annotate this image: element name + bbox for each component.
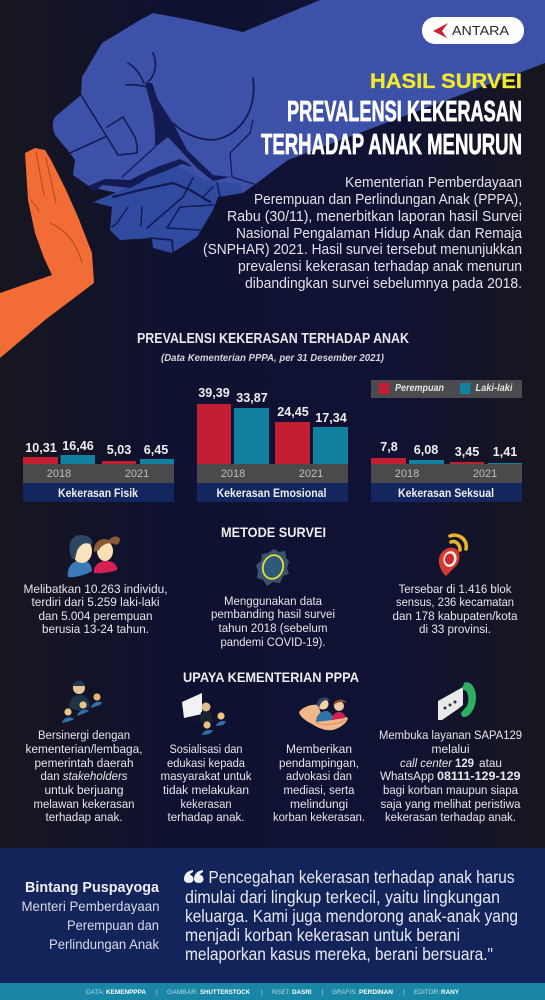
text: upaya column 3	[273, 742, 365, 824]
heading: upaya kementerian: UPAYA KEMENTERIAN PPPA	[183, 669, 359, 685]
chart heading: (Data Kementerian PPPA, per 31 Desember 2021)	[161, 353, 385, 364]
footer credits: SHUTTERSTOCK	[200, 989, 250, 996]
icon: presenter with board	[182, 693, 226, 735]
footer credits: RANY	[441, 989, 460, 996]
icon: hand protecting children	[299, 698, 348, 730]
footer credits: PERDINAN	[359, 989, 393, 996]
text: upaya column 4: kekerasan terhadap anak.	[385, 810, 516, 824]
bar chart: Kekerasan Seksual: 3,45	[455, 445, 479, 459]
text: upaya column 2: masyarakat untuk	[160, 769, 252, 783]
text: upaya column 2: tidak melakukan	[163, 783, 249, 797]
icon: location pin with signal	[439, 535, 466, 576]
text: metode column 1: Melibatkan 10.263 individu,	[24, 582, 168, 596]
bar chart: Kekerasan Seksual: Kekerasan Seksual	[398, 487, 494, 500]
text: upaya column 4: bagi korban maupun siapa	[383, 783, 518, 797]
text: upaya column 2: kekerasan	[180, 797, 232, 811]
text: upaya column 1: melawan kekerasan	[34, 797, 135, 811]
text: upaya column 2: edukasi kepada	[167, 756, 245, 770]
text: upaya column 4: Membuka layanan SAPA129	[379, 728, 522, 742]
icon: boy and girl	[68, 535, 120, 577]
intro paragraph	[203, 175, 523, 292]
footer credits	[0, 983, 545, 1000]
bar chart: Kekerasan Fisik: 6,45	[144, 443, 168, 457]
intro paragraph: Rabu (30/11), menerbitkan laporan hasil Survei	[227, 209, 522, 225]
text: metode column 3	[392, 582, 518, 636]
text: upaya column 1: untuk berjuang	[44, 783, 124, 797]
text: upaya column 1: terhadap anak.	[46, 810, 122, 824]
bar chart: Kekerasan Fisik: 16,46	[62, 439, 94, 453]
text: upaya column 4: 08111-129-129	[437, 769, 521, 783]
bar chart: Kekerasan Emosional: 2021	[299, 468, 323, 480]
quote attribution	[22, 879, 160, 952]
icon: gear	[256, 549, 289, 586]
bar chart: Kekerasan Emosional: Kekerasan Emosional	[216, 487, 326, 500]
text: upaya column 3: korban kekerasan.	[273, 810, 365, 824]
bar chart: Kekerasan Seksual: 1,41	[493, 445, 517, 459]
text: metode column 3: di 33 provinsi.	[419, 622, 491, 636]
text: upaya column 2	[160, 742, 252, 824]
text: upaya column 3: Memberikan	[286, 742, 352, 756]
bar chart: Kekerasan Seksual: 7,8	[380, 440, 398, 454]
text: upaya column 1	[26, 728, 142, 824]
text: upaya column 3: mediasi, serta	[284, 783, 355, 797]
text: upaya column 3: melindungi	[290, 797, 348, 811]
quote attribution: Perlindungan Anak	[49, 937, 159, 952]
text: upaya column 4: call center	[400, 756, 453, 770]
footer credits: RISET:	[272, 989, 290, 996]
text: metode column 1: terdiri dari 5.259 laki-laki	[32, 595, 160, 609]
text: upaya column 2: terhadap anak.	[168, 810, 244, 824]
bar chart: Kekerasan Emosional: 24,45	[277, 405, 309, 419]
bar chart: Kekerasan Emosional: 17,34	[315, 411, 347, 425]
chart heading	[137, 331, 409, 364]
intro paragraph: prevalensi kekerasan terhadap anak menurun	[238, 259, 522, 275]
chart legend: Perempuan	[395, 382, 444, 394]
panel: minister quote	[0, 848, 545, 983]
chart legend: Laki-laki	[476, 382, 513, 394]
text: metode column 2: tahun 2018 (sebelum	[218, 621, 328, 635]
footer credits: DASRI	[292, 989, 312, 996]
text: upaya column 1: Bersinergi dengan	[38, 728, 130, 742]
bar chart: Kekerasan Fisik: 10,31	[25, 441, 57, 455]
bar chart: Kekerasan Fisik: 2021	[125, 468, 149, 480]
footer credits: GAMBAR:	[167, 989, 198, 996]
text: upaya column 4: melalui	[432, 742, 470, 756]
footer credits: |	[261, 989, 263, 996]
bar chart: Kekerasan Fisik: 2018	[47, 468, 71, 480]
icon: quotation mark	[184, 870, 204, 883]
icon: chat bubble and phone	[438, 682, 476, 720]
text: metode column 3: dan 178 kabupaten/kota	[392, 609, 518, 623]
text: upaya column 4: atau	[479, 756, 502, 770]
text: metode column 3: sensus, 236 kecamatan	[396, 595, 514, 609]
footer credits: GRAFIS:	[332, 989, 357, 996]
text: upaya column 4: WhatsApp	[380, 769, 434, 783]
text: upaya column 1: kementerian/lembaga,	[26, 742, 142, 756]
bar chart: Kekerasan Emosional: 2018	[221, 468, 245, 480]
bar chart: Kekerasan Emosional: 39,39	[198, 386, 230, 400]
bar chart: Kekerasan Seksual: 6,08	[414, 443, 438, 457]
intro paragraph: (SNPHAR) 2021. Hasil survei tersebut menunjukkan	[203, 242, 522, 258]
text: upaya column 3: advokasi dan	[286, 769, 352, 783]
illustration: cracked blue fist	[53, 0, 545, 253]
bar chart: Kekerasan Seksual: 2018	[395, 468, 419, 480]
text: upaya column 4: saja yang melihat peristiwa	[380, 797, 521, 811]
intro paragraph: Nasional Pengalaman Hidup Anak dan Remaja	[236, 226, 523, 242]
text: metode column 1: berusia 13-24 tahun.	[42, 622, 149, 636]
text: upaya column 4: 129	[455, 756, 474, 770]
quote attribution: Menteri Pemberdayaan	[22, 899, 160, 914]
bar chart: Kekerasan Fisik: Kekerasan Fisik	[58, 487, 138, 500]
bar chart: Kekerasan Seksual	[371, 440, 522, 502]
quote text: dimulai dari lingkup terkecil, yaitu lingkungan	[185, 887, 500, 907]
text: upaya column 2: Sosialisasi dan	[170, 742, 243, 756]
text: metode column 1: dan 5.004 perempuan	[38, 609, 153, 623]
bar chart: Kekerasan Emosional	[197, 386, 348, 502]
icon: leader with team	[62, 681, 102, 723]
quote attribution: Perempuan dan	[67, 918, 159, 933]
text: upaya column 3: pendampingan,	[279, 756, 359, 770]
title: HASIL SURVEI	[370, 70, 522, 93]
quote text: melaporkan kasus mereka, berani bersuara."	[185, 944, 493, 964]
bar chart: Kekerasan Fisik	[23, 439, 174, 502]
bar chart: Kekerasan Fisik: 5,03	[107, 443, 131, 457]
text: upaya column 1: dan stakeholders	[40, 769, 128, 783]
footer credits: KEMENPPPA	[106, 989, 146, 996]
quote text: menjadi korban kekerasan untuk berani	[185, 925, 460, 945]
logo: ANTARA: ANTARA	[452, 23, 509, 38]
text: metode column 2: pandemi COVID-19).	[220, 635, 326, 649]
intro paragraph: Kementerian Pemberdayaan	[345, 175, 522, 191]
footer credits: |	[156, 989, 158, 996]
logo: ANTARA	[422, 17, 524, 44]
text: metode column 3: Tersebar di 1.416 blok	[398, 582, 512, 596]
chart legend	[371, 380, 522, 398]
text: metode column 2	[211, 594, 335, 649]
text: metode column 2: pembanding hasil survei	[211, 607, 335, 621]
quote attribution: Bintang Puspayoga	[25, 879, 160, 896]
text: metode column 1	[24, 582, 168, 636]
intro paragraph: dibandingkan survei sebelumnya pada 2018.	[245, 276, 522, 292]
title	[261, 70, 522, 161]
heading: metode survei: METODE SURVEI	[221, 524, 326, 540]
illustration: orange stop hand	[0, 148, 94, 358]
footer credits: |	[403, 989, 405, 996]
text: metode column 2: Menggunakan data	[224, 594, 322, 608]
bar chart: Kekerasan Emosional: 33,87	[236, 391, 268, 405]
chart heading: PREVALENSI KEKERASAN TERHADAP ANAK	[137, 331, 409, 347]
intro paragraph: Perempuan dan Perlindungan Anak (PPPA),	[254, 192, 522, 208]
footer credits: DATA:	[86, 989, 105, 996]
quote text	[185, 867, 518, 964]
footer credits: |	[322, 989, 324, 996]
text: upaya column 1: pemerintah daerah	[34, 756, 134, 770]
text: upaya column 4	[379, 728, 522, 824]
footer credits: EDITOR:	[414, 989, 440, 996]
bar chart: Kekerasan Seksual: 2021	[473, 468, 497, 480]
